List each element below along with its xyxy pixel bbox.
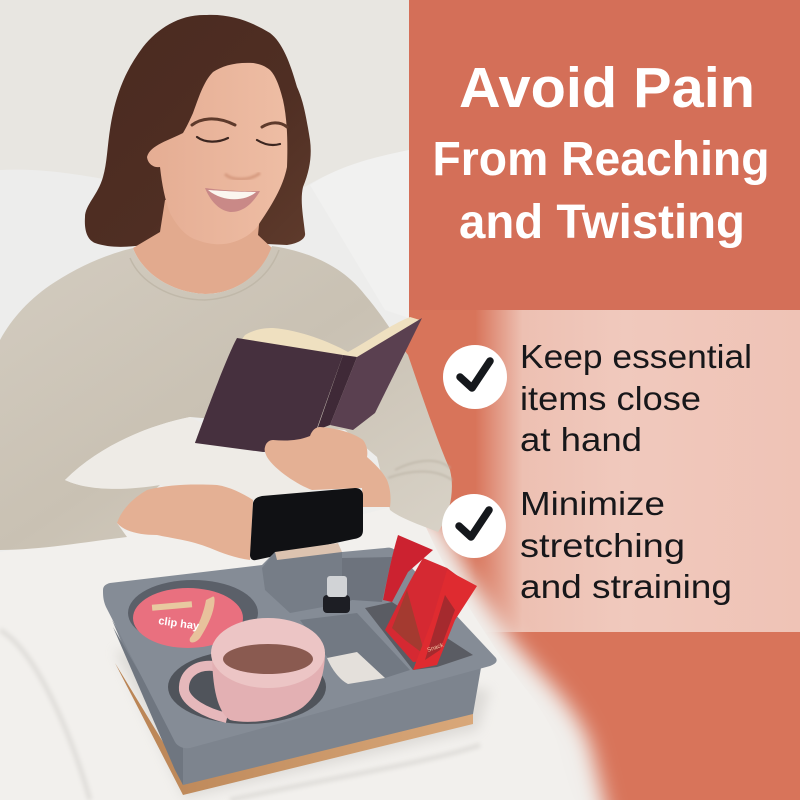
pink mug xyxy=(184,618,325,722)
tray xyxy=(103,535,497,795)
sheet folds xyxy=(0,630,480,800)
left wells xyxy=(128,580,258,631)
book pages xyxy=(240,317,420,360)
pink coaster: clip hay xyxy=(158,615,201,633)
blanket over lap xyxy=(65,417,190,489)
tray side xyxy=(112,620,482,785)
soap dish xyxy=(327,652,385,684)
pillows xyxy=(0,150,409,560)
bed sheet soft edge xyxy=(426,526,619,800)
red snack packets xyxy=(383,535,477,670)
stand wood tab xyxy=(275,543,342,560)
benefit: keep items close xyxy=(443,338,761,458)
panel: pale benefits band xyxy=(409,310,800,632)
benefit text: Minimize xyxy=(520,485,665,522)
book left cover xyxy=(195,338,343,452)
icon: check circle xyxy=(443,345,507,409)
upper hand xyxy=(265,427,391,507)
wood base xyxy=(115,663,473,795)
heading line 2: From Reaching xyxy=(432,133,770,186)
lower hand xyxy=(117,485,253,560)
tray shadow xyxy=(115,650,490,798)
book spine xyxy=(317,355,357,430)
centre compartment xyxy=(300,613,410,683)
icon: check circle xyxy=(442,494,506,558)
benefit: minimize stretching xyxy=(442,485,732,605)
benefit text: items close xyxy=(520,380,701,417)
face xyxy=(147,63,287,244)
eyebrows xyxy=(192,119,287,127)
heading xyxy=(432,56,770,249)
eyes xyxy=(197,137,280,145)
smile xyxy=(205,188,260,212)
phone stand xyxy=(262,552,342,613)
heading line 3: and Twisting xyxy=(459,196,745,249)
book xyxy=(195,317,422,452)
wall xyxy=(0,0,409,200)
panel: coral heading block xyxy=(409,0,800,310)
benefit text: at hand xyxy=(520,421,642,458)
upper compartment xyxy=(342,557,392,605)
benefit text: and straining xyxy=(520,568,732,605)
right compartment xyxy=(365,602,473,670)
heading line 1: Avoid Pain xyxy=(459,56,755,120)
nose xyxy=(225,173,260,179)
sweater xyxy=(0,246,452,550)
small bottle xyxy=(323,576,350,613)
tray top xyxy=(103,548,497,748)
phone xyxy=(250,488,363,560)
red snack packets: Snack xyxy=(427,642,445,654)
hair xyxy=(85,15,311,247)
sweater folds xyxy=(130,250,452,480)
photo: woman reading in bed with tray xyxy=(0,0,610,800)
benefit text: stretching xyxy=(520,527,685,564)
benefit text: Keep essential xyxy=(520,338,752,375)
neck xyxy=(133,195,272,294)
pink coaster xyxy=(133,588,243,648)
bed sheets xyxy=(0,514,434,800)
book right cover xyxy=(330,318,422,430)
